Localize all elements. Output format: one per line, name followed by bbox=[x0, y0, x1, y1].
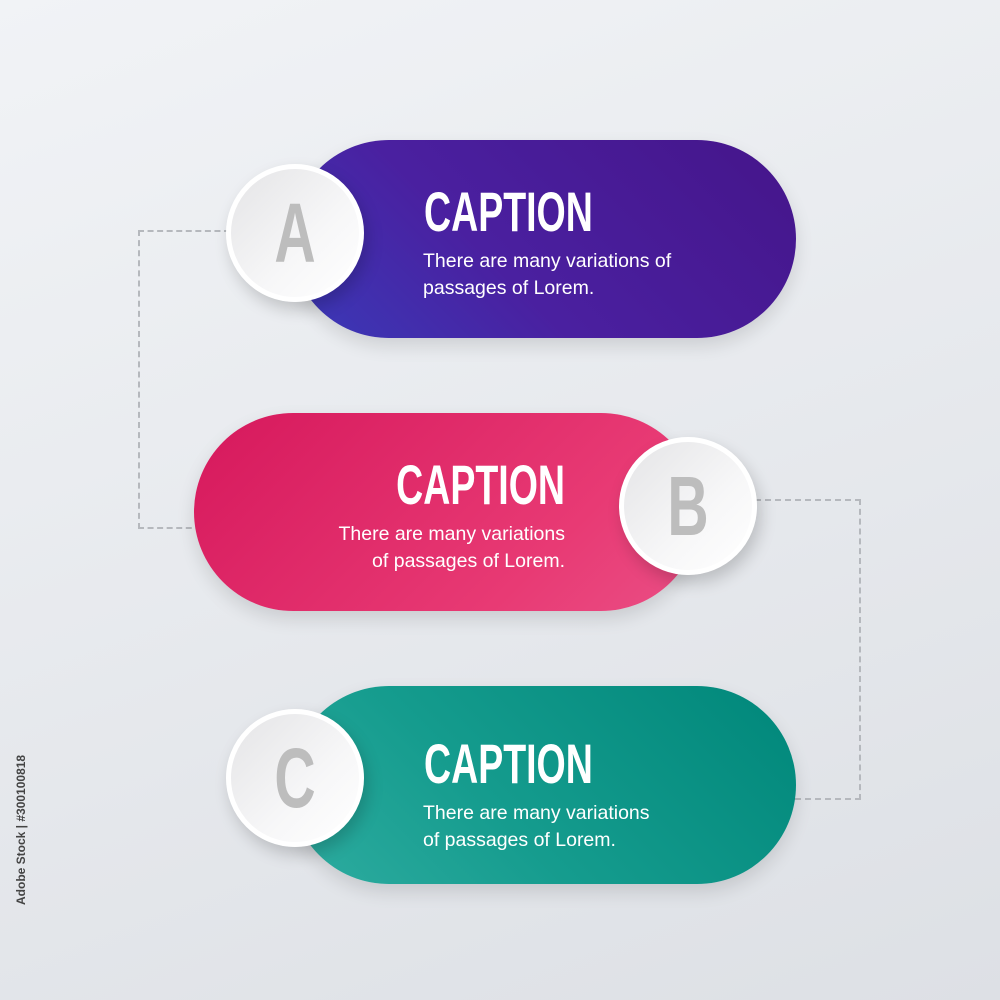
heading C: CAPTION bbox=[424, 732, 593, 795]
connector left bbox=[138, 230, 230, 529]
text C: There are many variations bbox=[423, 802, 650, 824]
text C bbox=[423, 802, 650, 851]
connector right bbox=[755, 499, 861, 800]
icon: circle A: A bbox=[274, 186, 316, 280]
icon: circle A bbox=[226, 164, 364, 302]
icon: circle C bbox=[226, 709, 364, 847]
icon: circle B: B bbox=[667, 459, 709, 553]
panel: B bbox=[194, 413, 700, 611]
text B bbox=[338, 523, 565, 572]
text A: passages of Lorem. bbox=[423, 277, 594, 299]
panel: A bbox=[290, 140, 796, 338]
text A: There are many variations of bbox=[423, 250, 671, 272]
watermark id: Adobe Stock | #300100818 bbox=[14, 755, 28, 905]
text B: of passages of Lorem. bbox=[372, 550, 565, 572]
text B: There are many variations bbox=[338, 523, 565, 545]
text A bbox=[423, 250, 672, 299]
icon: circle B bbox=[619, 437, 757, 575]
icon: circle C: C bbox=[274, 731, 316, 825]
heading B: CAPTION bbox=[396, 453, 565, 516]
text C: of passages of Lorem. bbox=[423, 829, 616, 851]
heading A: CAPTION bbox=[424, 180, 593, 243]
panel: C bbox=[290, 686, 796, 884]
